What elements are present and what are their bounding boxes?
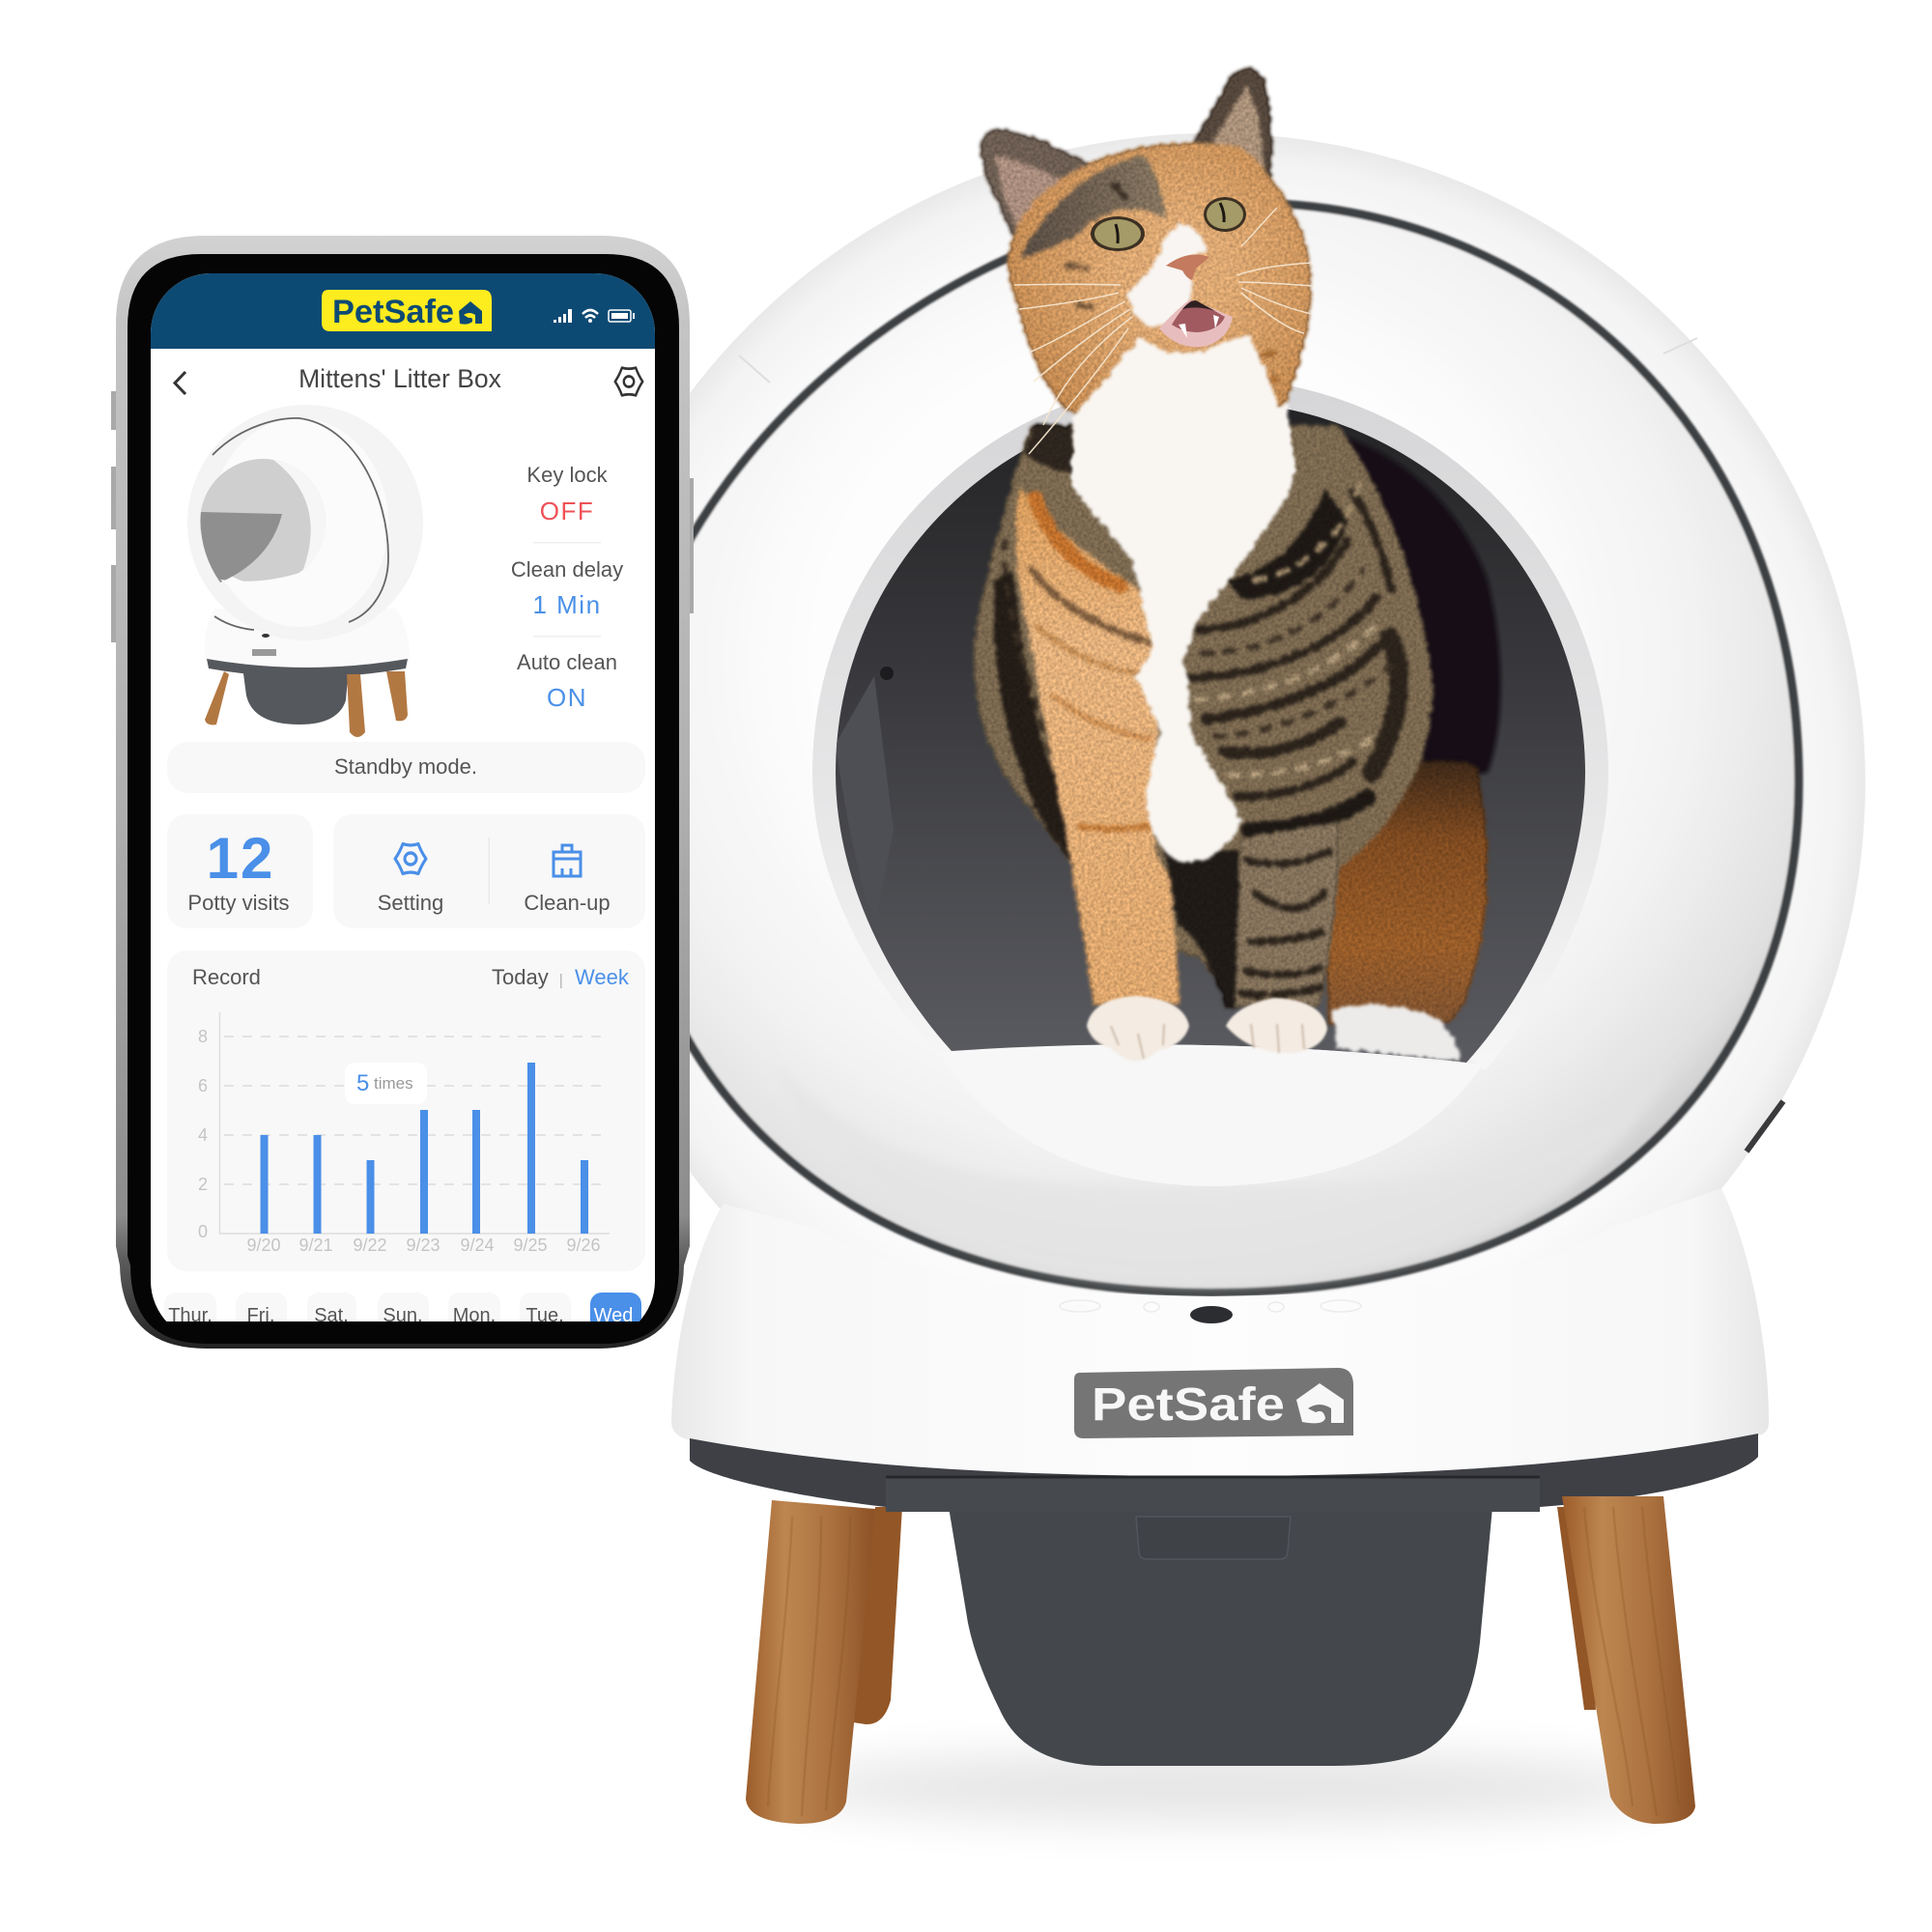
tabby stripes xyxy=(1186,493,1399,831)
tooltip xyxy=(353,1074,427,1091)
left inner ear xyxy=(995,155,1067,232)
status list xyxy=(511,463,623,712)
dark body shadow xyxy=(1338,435,1501,792)
status icons xyxy=(554,309,635,323)
day tabs: Sat. xyxy=(314,1305,349,1326)
tabby body xyxy=(974,425,1433,1005)
bar chart: 0 xyxy=(198,1222,208,1241)
bar chart: 9/24 xyxy=(460,1236,495,1255)
setting icon xyxy=(395,844,426,873)
dark interior opening xyxy=(836,401,1585,1063)
standby pill: Standby mode. xyxy=(334,754,477,779)
key lock xyxy=(528,467,608,520)
left flank dark stripe xyxy=(994,570,1077,869)
bar chart: 9/21 xyxy=(298,1236,333,1255)
flap shadow line xyxy=(886,1476,1540,1478)
right inner ear xyxy=(1213,85,1264,166)
day tabs: Sun. xyxy=(383,1305,423,1326)
tabby flecks xyxy=(1005,473,1391,775)
bar chart: 9/25 xyxy=(513,1236,548,1255)
white blaze and muzzle xyxy=(1127,224,1208,328)
orange haunch xyxy=(1323,760,1488,1024)
leg stripes xyxy=(1241,850,1331,995)
yellow PetSafe logo: PetSafe xyxy=(332,294,454,330)
bar chart xyxy=(198,1012,610,1255)
potty visits card xyxy=(189,837,289,914)
clean delay: Clean delay xyxy=(511,557,623,582)
side button xyxy=(1747,1101,1783,1151)
bar chart: 9/26 xyxy=(566,1236,601,1255)
back chevron xyxy=(175,372,185,394)
base xyxy=(671,1188,1769,1512)
sphere outer shell xyxy=(559,133,1865,1432)
black collar crescent xyxy=(1227,488,1348,599)
camera button xyxy=(1190,1306,1233,1323)
phone black bezel xyxy=(128,254,679,1344)
settings gear xyxy=(615,368,642,395)
tooltip: 5 xyxy=(356,1070,369,1096)
actions card: Setting xyxy=(378,891,443,915)
logo badge xyxy=(1074,1368,1353,1438)
interior side mesh xyxy=(837,667,894,840)
back legs xyxy=(853,1507,1596,1724)
bar chart: 9/23 xyxy=(406,1236,440,1255)
head xyxy=(1008,143,1311,428)
door gap dark line xyxy=(622,203,1799,1293)
day tabs xyxy=(164,1293,641,1321)
wood grain xyxy=(768,1507,1679,1816)
dark base rim xyxy=(690,1434,1758,1512)
floor shadow xyxy=(782,1752,1671,1822)
litter box product xyxy=(559,133,1865,1824)
cat leg and head fur xyxy=(980,68,1338,1007)
left front paw xyxy=(1087,996,1189,1061)
day tabs: Mon. xyxy=(453,1305,496,1326)
yellow PetSafe logo xyxy=(322,290,492,331)
record card xyxy=(193,969,629,1251)
drawer flap xyxy=(886,1478,1540,1512)
mouth xyxy=(1159,299,1233,347)
left ear xyxy=(980,128,1101,253)
clean delay: 1 Min xyxy=(532,590,602,619)
key lock: Key lock xyxy=(526,463,609,487)
clean delay xyxy=(512,561,623,613)
phone screen xyxy=(151,273,655,1341)
record card: Today xyxy=(492,965,549,989)
whiskers xyxy=(1014,208,1314,454)
button row xyxy=(1060,1300,1361,1312)
shell seams xyxy=(739,338,1697,383)
chin and ruff xyxy=(1072,336,1294,497)
day tabs: Thur. xyxy=(168,1305,213,1326)
cat face white fur xyxy=(1072,224,1294,497)
front legs xyxy=(746,1496,1695,1824)
cat xyxy=(974,68,1501,1061)
orange torso and left leg xyxy=(1016,488,1180,1005)
neck band xyxy=(1024,425,1080,475)
face markings xyxy=(1067,184,1275,382)
cat body fur xyxy=(974,425,1488,1024)
lower door shading xyxy=(773,1063,1671,1287)
bar chart: 6 xyxy=(198,1076,208,1095)
bar chart: 9/22 xyxy=(353,1236,387,1255)
tabby right leg xyxy=(1235,821,1338,1007)
auto clean: ON xyxy=(547,683,587,712)
nose xyxy=(1166,254,1209,280)
white chest and belly xyxy=(1071,386,1294,862)
day tabs: Tue. xyxy=(526,1305,564,1326)
actions card: Clean-up xyxy=(524,891,611,915)
tooltip: times xyxy=(374,1074,413,1093)
bar chart: 8 xyxy=(198,1027,208,1046)
right front paw xyxy=(1226,998,1327,1053)
app header xyxy=(151,273,655,349)
bar chart: 9/20 xyxy=(246,1236,281,1255)
day tabs: Wed xyxy=(594,1305,633,1326)
phone side buttons xyxy=(111,391,694,642)
tail tip xyxy=(1331,1005,1459,1061)
potty visits card: Potty visits xyxy=(187,891,290,915)
auto clean xyxy=(517,654,616,707)
mini product image xyxy=(187,405,423,737)
logo badge: PetSafe xyxy=(1092,1379,1285,1431)
opening rim xyxy=(824,389,1597,1063)
orange stripes xyxy=(1032,497,1154,829)
bar chart: 4 xyxy=(198,1125,208,1145)
clean-up icon xyxy=(554,845,581,876)
waste drawer bin xyxy=(949,1507,1492,1766)
record card: Record xyxy=(192,965,261,989)
phone silver frame xyxy=(116,236,690,1349)
forehead tabby patch xyxy=(1020,155,1166,259)
key lock: OFF xyxy=(540,497,594,526)
phone xyxy=(111,236,694,1349)
dark shadow between legs xyxy=(1164,850,1241,1009)
cat white fur xyxy=(1071,386,1459,1061)
eyes xyxy=(1091,197,1246,251)
actions card xyxy=(379,838,610,914)
potty visits card: 12 xyxy=(207,826,274,891)
right ear xyxy=(1191,68,1272,179)
door floor lip xyxy=(939,1044,1483,1186)
auto clean: Auto clean xyxy=(517,650,617,674)
day tabs: Fri. xyxy=(247,1305,274,1326)
bar chart: 2 xyxy=(198,1175,208,1194)
record card: Week xyxy=(575,965,630,989)
title: Mittens' Litter Box xyxy=(298,364,501,393)
